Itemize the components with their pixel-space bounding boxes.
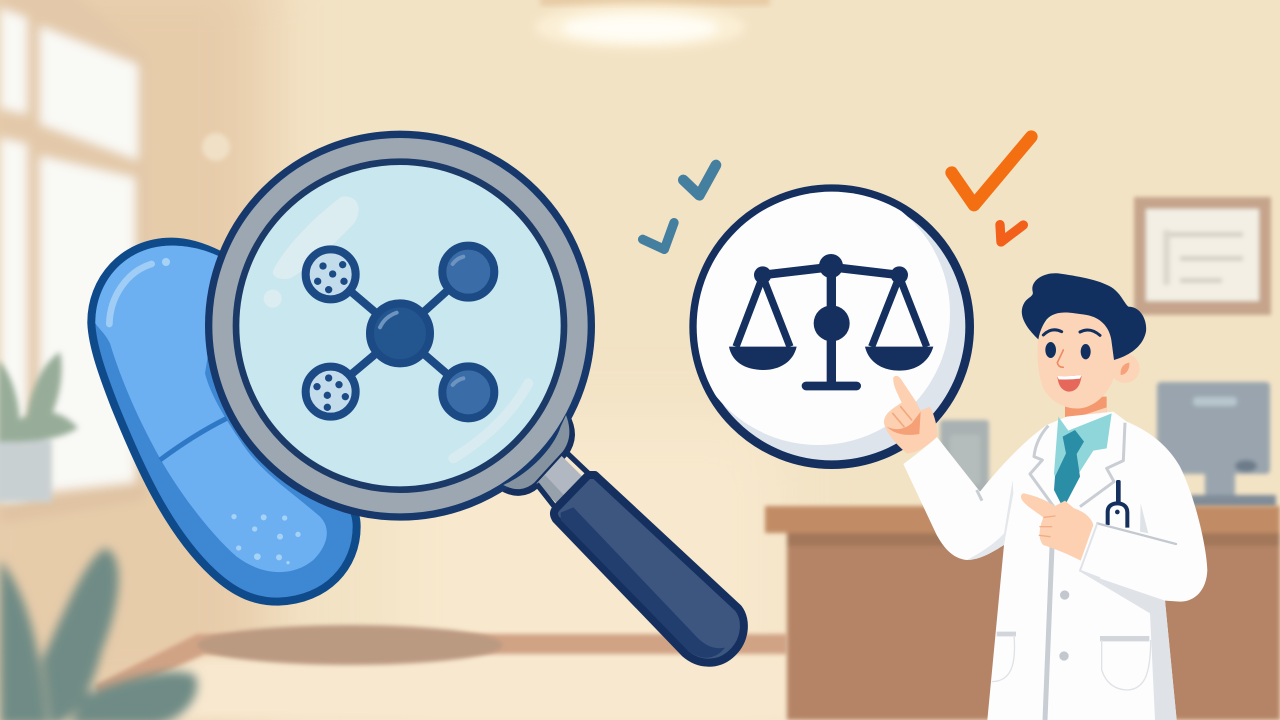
doctor: ear — [1110, 354, 1140, 383]
pill: score line — [160, 418, 227, 460]
doctor: placket — [1045, 547, 1052, 720]
background: small wall dot — [202, 133, 230, 161]
doctor: eyebrows — [1043, 330, 1100, 335]
magnifier: rim — [209, 134, 591, 517]
pill: highlight — [109, 264, 152, 324]
magnifier: lens — [236, 162, 564, 490]
floor shadow under magnifier — [197, 625, 503, 665]
doctor: lab coat — [903, 412, 1207, 720]
background: potted plant at window — [0, 352, 78, 502]
plate: white face — [687, 182, 950, 445]
doctor: hair — [1022, 273, 1146, 360]
doctor: nose — [1057, 350, 1063, 367]
doctor: lower sleeve and cuff — [1080, 523, 1176, 600]
magnifier: handle assembly — [487, 415, 744, 663]
doctor: tie — [1054, 430, 1084, 508]
background: framed certificate — [1134, 197, 1271, 315]
doctor: chest pointing hand — [1021, 493, 1093, 561]
doctor: mouth — [1057, 375, 1082, 392]
magnifying glass — [209, 134, 744, 663]
pill: lighter face — [95, 246, 327, 572]
background: reception desk — [765, 506, 1280, 720]
check marks: orange — [952, 137, 1031, 242]
scales: left pan — [729, 347, 797, 370]
magnifier: collar overlay — [503, 415, 569, 488]
doctor: coat shading — [1080, 572, 1177, 720]
molecule: solid atoms — [442, 246, 494, 418]
background: floor and baseboard — [90, 634, 790, 720]
magnifier: metal neck — [537, 456, 583, 505]
scales of justice icon — [729, 254, 933, 390]
balance plate — [687, 182, 970, 465]
magnifier: grip — [554, 475, 744, 663]
doctor: pocket pen — [1108, 480, 1127, 528]
blue pill — [91, 242, 357, 602]
pill: speckles — [162, 258, 301, 564]
magnifier: collar outline — [487, 415, 572, 493]
doctor: buttons — [1059, 590, 1069, 661]
doctor: pocket crease — [1140, 503, 1148, 533]
molecule — [306, 246, 494, 418]
background: foreground plant — [0, 548, 197, 720]
doctor: raised pointing hand — [884, 376, 937, 453]
scales: right pan — [865, 347, 933, 371]
doctor: face — [1037, 303, 1117, 408]
magnifier: grip shadow — [561, 507, 725, 658]
doctor — [884, 273, 1207, 720]
doctor: shirt — [1054, 413, 1112, 508]
molecule: centre atom — [370, 303, 430, 363]
molecule: speckled atoms — [306, 249, 356, 417]
doctor: pockets — [992, 634, 1151, 690]
check marks: teal — [643, 165, 716, 249]
doctor: lapels — [977, 423, 1125, 508]
background: ceiling lamp — [535, 0, 770, 49]
magnifier: glass reflections — [264, 196, 528, 458]
doctor: eyes — [1045, 342, 1091, 359]
doctor: neck — [1065, 397, 1107, 430]
background: window — [0, 0, 148, 524]
background: computer monitors — [940, 382, 1276, 507]
